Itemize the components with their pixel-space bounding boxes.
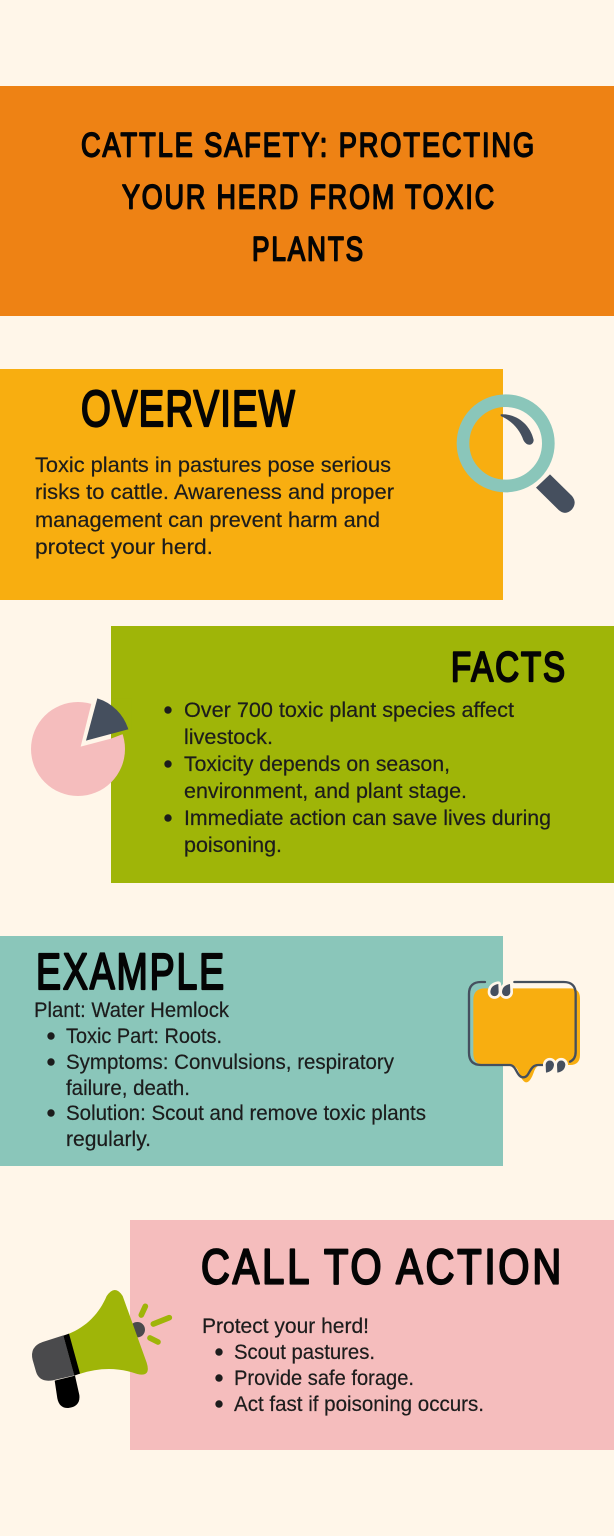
title: [81, 126, 536, 268]
icon: pie chart: [31, 698, 132, 796]
list: example: [34, 999, 426, 1151]
list: call to action: [202, 1315, 484, 1416]
list: call to action: Act fast if poisoning occurs.: [234, 1393, 484, 1416]
panel: call to action: [130, 1220, 614, 1450]
list: example: Toxic Part: Roots.: [66, 1025, 222, 1048]
list: example: regularly.: [66, 1128, 151, 1151]
heading: example: EXAMPLE: [36, 943, 226, 1000]
list: call to action: Scout pastures.: [234, 1341, 375, 1364]
text: overview body: protect your herd.: [35, 536, 213, 559]
icon: speech bubble: [469, 982, 580, 1082]
list: call to action: Protect your herd!: [202, 1315, 369, 1338]
text: overview body: Toxic plants in pastures pose serious: [35, 454, 391, 477]
text: overview body: management can prevent harm and: [35, 509, 380, 532]
title: PLANTS: [252, 230, 365, 268]
icon: magnifying glass: [463, 401, 575, 513]
panel: example: [0, 936, 503, 1166]
list: example: failure, death.: [66, 1077, 190, 1100]
list: facts: poisoning.: [184, 834, 282, 857]
list: facts: Immediate action can save lives during: [184, 807, 551, 830]
title: YOUR HERD FROM TOXIC: [122, 178, 496, 216]
heading: facts: FACTS: [451, 643, 567, 690]
icon: megaphone: [32, 1290, 169, 1408]
text: overview body: risks to cattle. Awareness and proper: [35, 481, 394, 504]
list: call to action: Provide safe forage.: [234, 1367, 414, 1390]
list: facts: Over 700 toxic plant species affect: [184, 699, 514, 722]
list: facts: [164, 699, 551, 857]
panel: overview: [0, 369, 503, 600]
heading: overview: OVERVIEW: [81, 380, 296, 437]
text: overview body: [35, 454, 394, 559]
list: facts: livestock.: [184, 726, 273, 749]
panel: title banner: [0, 86, 614, 316]
list: example: Plant: Water Hemlock: [34, 999, 229, 1022]
list: example: Solution: Scout and remove toxic plants: [66, 1102, 426, 1125]
list: example: Symptoms: Convulsions, respiratory: [66, 1051, 394, 1074]
list: facts: environment, and plant stage.: [184, 780, 467, 803]
list: facts: Toxicity depends on season,: [184, 753, 450, 776]
panel: facts: [111, 626, 614, 883]
